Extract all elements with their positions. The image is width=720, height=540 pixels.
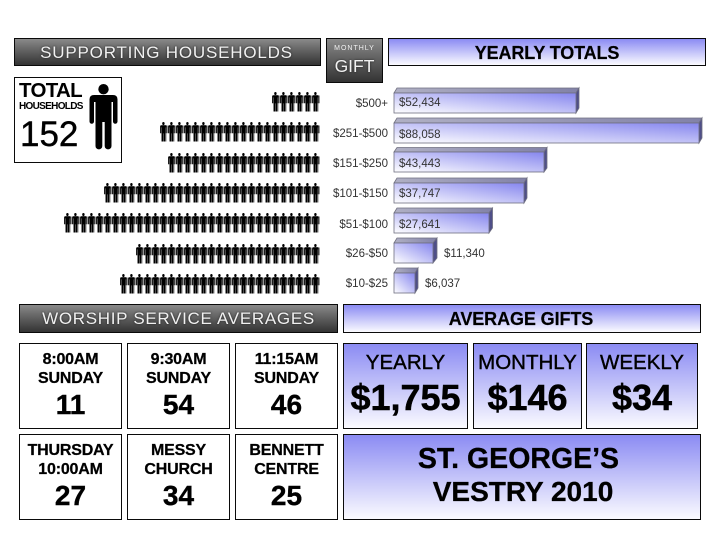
attendance number: 46: [271, 389, 302, 420]
bar: $51-$100: $51-$100: [339, 219, 388, 231]
heading: yearly totals: YEARLY TOTALS: [475, 43, 619, 63]
bar: $101-$150: $101-$150: [333, 188, 388, 200]
bar: $101-$150: $37,747: [399, 188, 441, 200]
bar: $51-$100: $27,641: [399, 219, 441, 231]
bar: $251-$500: [333, 118, 702, 143]
pictogram: households per gift band: [64, 92, 320, 294]
heading: supporting households: [14, 38, 321, 66]
heading: worship service averages: [19, 304, 338, 333]
attendance number: 25: [271, 480, 302, 511]
panel: weekly average: [586, 343, 698, 429]
bar: $26-$50: [346, 238, 485, 263]
row: $51-$100 32 households: [64, 213, 320, 233]
row: $500+ 6 households: [272, 92, 320, 112]
panel: 9:30am sunday: [127, 343, 230, 429]
bar: $10-$25: $6,037: [425, 278, 460, 290]
row: $26-$50 23 households: [136, 244, 320, 264]
panel: 11:15am sunday: [235, 343, 338, 429]
bar: $26-$50: $11,340: [444, 248, 485, 260]
bar: $101-$150: [333, 178, 527, 203]
heading: supporting households: SUPPORTING HOUSEHOLDS: [40, 43, 293, 62]
heading: monthly gift: GIFT: [335, 56, 374, 76]
panel: 8:00am sunday: [19, 343, 122, 429]
bar: $251-$500: $251-$500: [333, 128, 388, 140]
attendance number: 54: [163, 389, 194, 420]
panel: 9:30am sunday: 9:30AM: [151, 351, 206, 368]
heading: worship service averages: WORSHIP SERVICE AVERAGES: [42, 309, 315, 328]
row: $10-$25 25 households: [120, 274, 320, 294]
panel: total households: [14, 77, 122, 163]
panel: yearly average: YEARLY: [366, 351, 445, 374]
panel: thursday 10:00am: [19, 434, 122, 520]
row: $151-$250 19 households: [168, 153, 320, 173]
total label: TOTAL: [19, 79, 82, 102]
attendance number: 34: [163, 480, 194, 511]
bar: $151-$250: [333, 148, 547, 172]
bar: $151-$250: $43,443: [399, 158, 441, 170]
panel: weekly average: WEEKLY: [600, 351, 684, 374]
bar: $10-$25: $10-$25: [346, 278, 388, 290]
bar chart: yearly totals: [333, 86, 703, 294]
panel: 8:00am sunday: 8:00AM: [43, 351, 98, 368]
panel: messy church: CHURCH: [144, 460, 213, 478]
heading: yearly totals: [388, 38, 706, 66]
panel: thursday 10:00am: THURSDAY: [28, 442, 113, 459]
yearly amount: $1,755: [350, 377, 461, 418]
panel: 8:00am sunday: SUNDAY: [38, 370, 103, 386]
attendance number: 27: [55, 480, 86, 511]
weekly amount: $34: [612, 377, 672, 418]
heading: average gifts: AVERAGE GIFTS: [449, 309, 593, 329]
bar: $500+: $500+: [356, 98, 388, 110]
row: $251-$500 20 households: [160, 122, 320, 142]
bar: $51-$100: [339, 208, 492, 233]
title: st. george's vestry 2010: VESTRY 2010: [433, 476, 613, 507]
attendance number: 11: [56, 389, 85, 420]
bar: $26-$50: $26-$50: [346, 248, 388, 260]
monthly amount: $146: [487, 377, 568, 418]
heading: monthly gift: MONTHLY: [334, 45, 375, 52]
panel: 11:15am sunday: SUNDAY: [254, 370, 319, 386]
bar: $151-$250: $151-$250: [333, 158, 388, 170]
row: $101-$150 27 households: [104, 183, 320, 203]
panel: thursday 10:00am: 10:00AM: [38, 460, 103, 478]
bar: $251-$500: $88,058: [399, 129, 441, 141]
bar: $500+: [356, 88, 579, 113]
bar: $500+: $52,434: [399, 97, 441, 109]
total number: 152: [20, 115, 78, 154]
title: st. george's vestry 2010: ST. GEORGE’S: [418, 443, 619, 475]
panel: bennett centre: BENNETT: [249, 442, 324, 459]
heading: monthly gift: [326, 38, 383, 83]
panel: yearly average: [343, 343, 468, 429]
panel: 9:30am sunday: SUNDAY: [146, 370, 211, 386]
households label: HOUSEHOLDS: [19, 101, 83, 112]
panel: messy church: [127, 434, 230, 520]
bar: $10-$25: [346, 268, 460, 293]
title: st. george's vestry 2010: [343, 434, 701, 520]
heading: average gifts: [343, 304, 701, 333]
panel: monthly average: [473, 343, 582, 429]
panel: messy church: MESSY: [151, 442, 206, 459]
panel: monthly average: MONTHLY: [478, 351, 577, 374]
panel: 11:15am sunday: 11:15AM: [255, 351, 318, 368]
panel: bennett centre: CENTRE: [254, 460, 319, 478]
panel: bennett centre: [235, 434, 338, 520]
icon: person: [90, 84, 118, 150]
